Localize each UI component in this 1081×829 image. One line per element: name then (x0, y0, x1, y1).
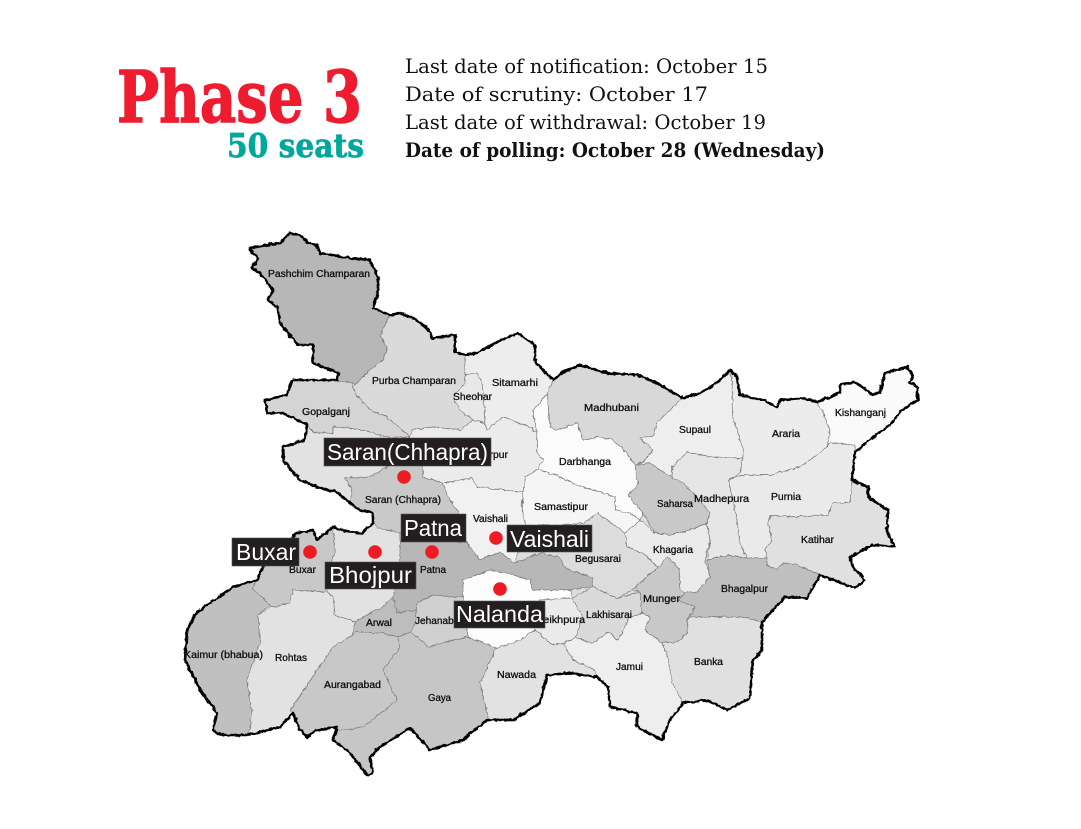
name: Bhagalpur: Bhagalpur (721, 584, 769, 595)
name: Buxar: Buxar (289, 565, 317, 576)
district: Kaimur (185, 580, 270, 735)
date line: withdrawal: Last date of withdrawal: October 19 (405, 110, 766, 134)
marker: Saran (397, 470, 411, 484)
name: Rohtas: Rohtas (275, 653, 307, 664)
district: Vaishali (443, 478, 525, 563)
title: Phase 3: Phase 3 (117, 55, 362, 139)
name: Banka: Banka (694, 657, 724, 668)
date line: polling: Date of polling: October 28 (Wednesday) (405, 138, 825, 162)
text block: key dates (405, 54, 825, 162)
district: Jamui (563, 613, 683, 740)
district: Katihar (765, 480, 895, 588)
name: Gopalganj: Gopalganj (302, 407, 350, 418)
district: Nalanda (463, 570, 572, 648)
name: Aurangabad: Aurangabad (324, 680, 381, 691)
district shapes (185, 233, 918, 775)
district: Sitamarhi (465, 333, 553, 433)
district name labels (184, 269, 886, 704)
name: Pashchim Champaran: Pashchim Champaran (268, 269, 370, 280)
callout: Vaishali: Vaishali (510, 526, 589, 552)
district: Patna (393, 533, 593, 613)
name: Gaya: Gaya (428, 693, 452, 704)
district: Gaya (333, 633, 497, 775)
callout: Saran(Chhapra): Saran(Chhapra) (327, 439, 488, 465)
callout: Nalanda: Nalanda (456, 601, 543, 627)
district: Darbhanga (533, 393, 643, 520)
district: Banka (662, 617, 762, 710)
date line: scrutiny: Date of scrutiny: October 17 (405, 82, 708, 106)
district: Araria (728, 370, 830, 480)
marker: Patna (425, 545, 439, 559)
district: Saharsa (628, 463, 710, 535)
callout labels (232, 438, 592, 628)
callout: Bhojpur: Bhojpur (329, 562, 412, 588)
district: Nawada (480, 630, 597, 720)
district: Samastipur (522, 470, 640, 533)
district: Aurangabad (290, 632, 400, 737)
district: Sheikhpura (535, 598, 583, 645)
name: Kishanganj: Kishanganj (835, 408, 886, 419)
callout: Patna: Patna (404, 515, 462, 541)
district: Supaul (635, 370, 743, 477)
polling location markers (303, 470, 507, 596)
district: Lakhisarai (572, 587, 642, 643)
name: Supaul: Supaul (679, 425, 711, 436)
name: Jehanabad: Jehanabad (415, 616, 465, 627)
name: Khagaria: Khagaria (653, 545, 694, 556)
district: Siwan (283, 425, 410, 503)
district: Gopalganj (265, 380, 410, 438)
name: Vaishali: Vaishali (473, 514, 508, 525)
name: Sitamarhi: Sitamarhi (492, 378, 538, 389)
name: Purnia: Purnia (771, 492, 802, 503)
marker: Nalanda (493, 582, 507, 596)
name: Madhepura: Madhepura (694, 494, 750, 505)
marker: Vaishali (489, 531, 503, 545)
name: Nawada: Nawada (497, 670, 537, 681)
district: Bhojpur (327, 523, 400, 622)
callout: Buxar: Buxar (236, 539, 296, 565)
name: Purba Champaran: Purba Champaran (372, 376, 456, 387)
name: Darbhanga: Darbhanga (559, 457, 612, 468)
name: Sheikhpura: Sheikhpura (530, 615, 586, 626)
name: Begusarai: Begusarai (575, 554, 621, 565)
marker: Bhojpur (368, 545, 382, 559)
name: Katihar: Katihar (801, 535, 835, 546)
subtitle: 50 seats: 50 seats (227, 126, 364, 165)
district: Buxar (252, 527, 335, 607)
district: Madhubani (547, 365, 683, 465)
state outline (185, 233, 918, 775)
district: Saran (345, 437, 467, 543)
name: Jamui: Jamui (616, 662, 643, 673)
marker: Buxar (303, 545, 317, 559)
date line: notification: Last date of notification: October 15 (405, 54, 768, 78)
name: Madhubani: Madhubani (584, 403, 639, 414)
name: Saran (Chhapra): Saran (Chhapra) (365, 495, 441, 506)
district: Sheohar (453, 373, 485, 423)
district: Begusarai (515, 513, 658, 598)
district: Bhagalpur (678, 555, 820, 622)
district: Khagaria (625, 520, 710, 593)
district: Muzaffarpur (410, 417, 543, 492)
name: Saharsa: Saharsa (657, 499, 694, 510)
name: Lakhisarai: Lakhisarai (586, 610, 632, 621)
district: Pashchim Champaran (250, 233, 390, 385)
name: Patna: Patna (420, 565, 447, 576)
name: Sheohar: Sheohar (453, 392, 493, 403)
district: Jehanabad (410, 595, 468, 647)
district: Purba Champaran (352, 313, 473, 437)
name: Munger: Munger (643, 594, 681, 605)
name: Samastipur: Samastipur (534, 502, 589, 513)
district: Madhepura (672, 452, 747, 560)
name: Kaimur (bhabua): Kaimur (bhabua) (184, 650, 263, 661)
district: Munger (632, 557, 695, 643)
district: Rohtas (247, 590, 355, 735)
district: Kishanganj (817, 367, 918, 452)
name: Araria: Araria (772, 429, 801, 440)
map: Bihar districts (185, 233, 918, 775)
name: Muzaffarpur: Muzaffarpur (453, 450, 509, 461)
district: Purnia (728, 443, 855, 558)
map base fill (185, 233, 918, 775)
district: Arwal (352, 597, 417, 637)
name: Arwal: Arwal (366, 618, 392, 629)
